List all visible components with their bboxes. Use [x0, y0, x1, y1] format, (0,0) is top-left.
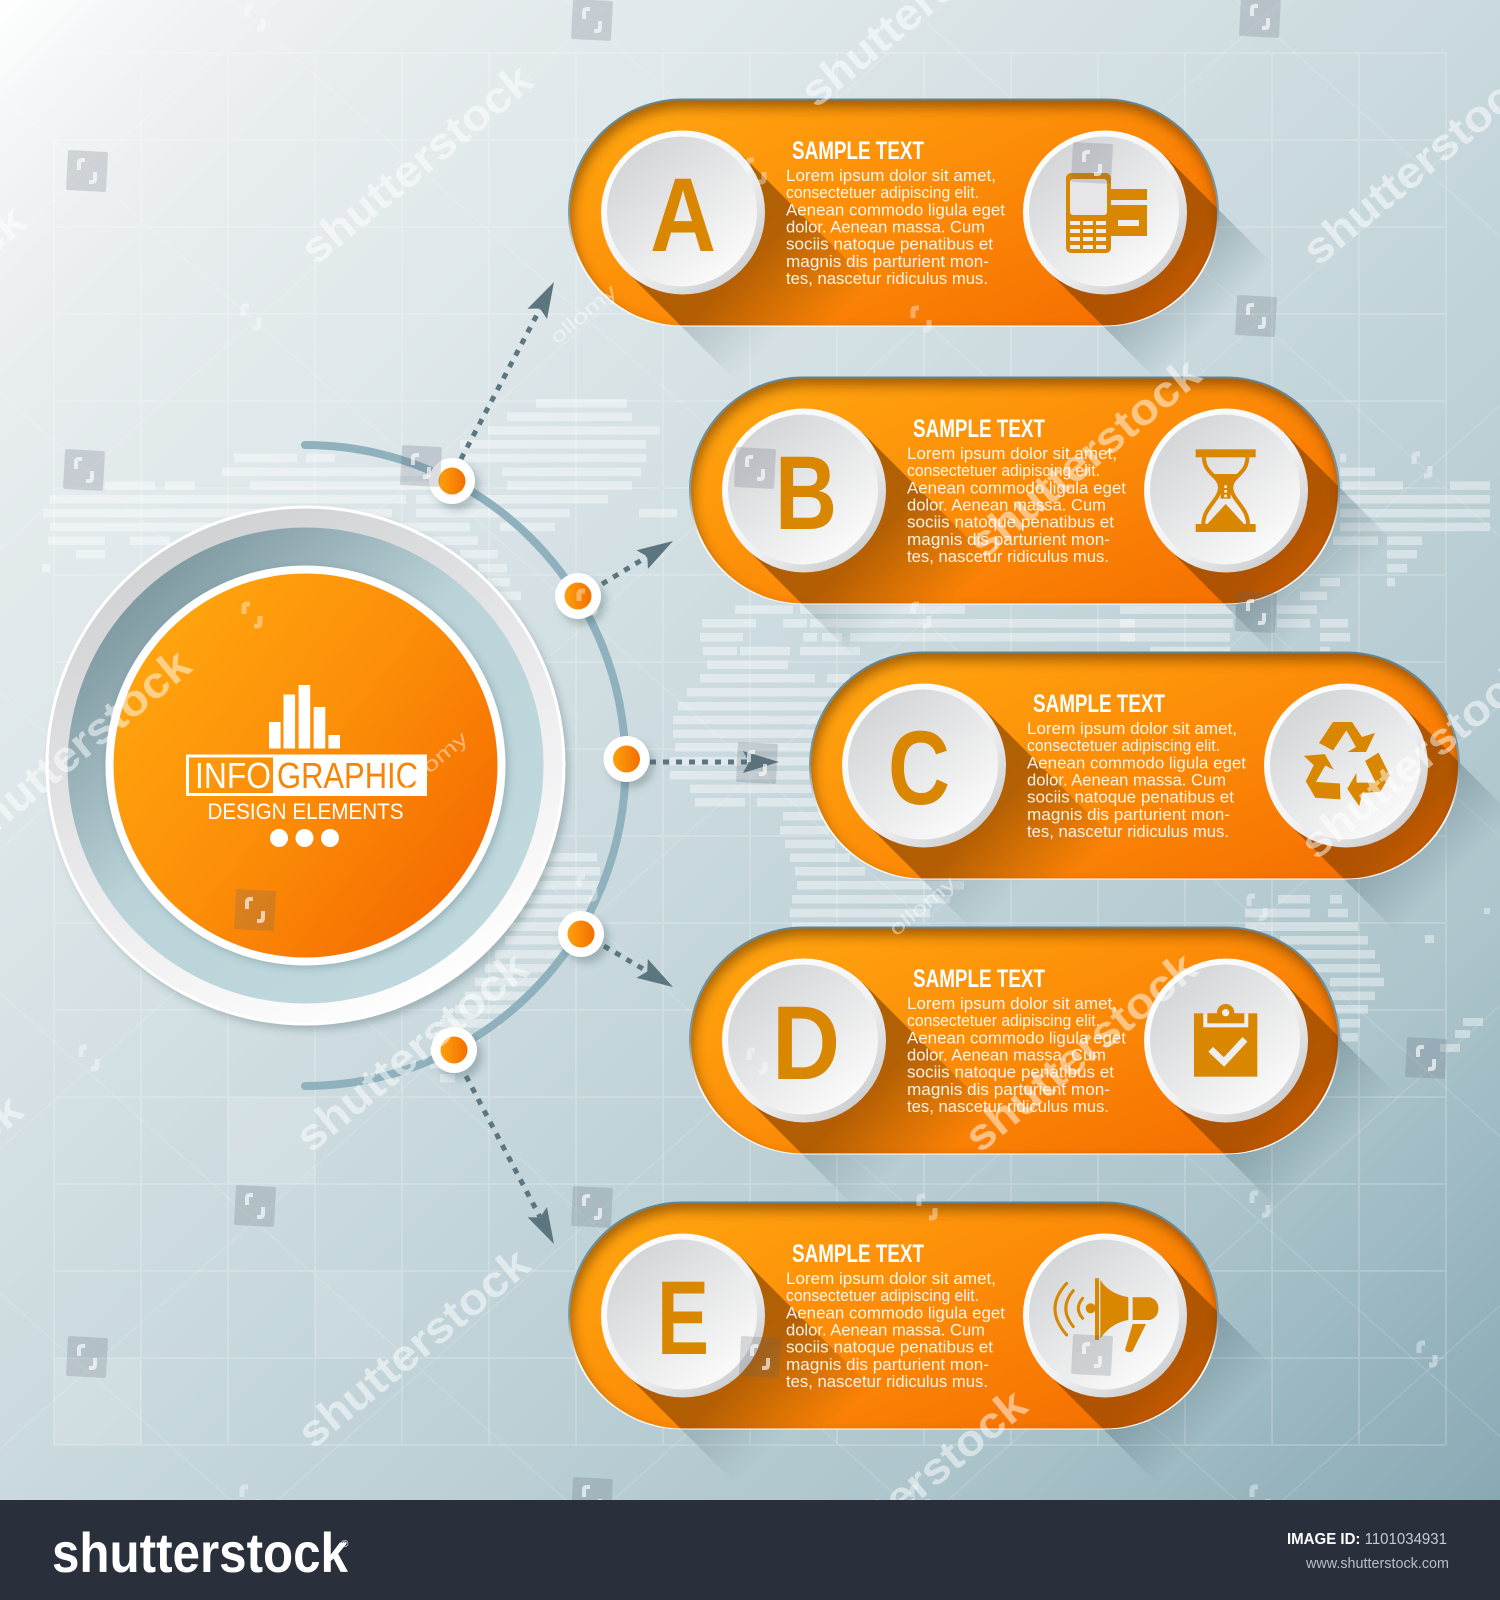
body text E: magnis dis parturient mon-: [786, 1355, 989, 1374]
south america stripes: [430, 853, 600, 1082]
watermark text: shutterstock: [288, 1238, 540, 1458]
node 2: [555, 573, 606, 625]
contributor marks: ollomy: [397, 728, 472, 796]
inner groove: [68, 528, 544, 1004]
body text C: magnis dis parturient mon-: [1027, 805, 1230, 824]
body text D: Lorem ipsum dolor sit amet,: [907, 994, 1117, 1013]
body text D: Aenean commodo ligula eget: [907, 1028, 1126, 1047]
arrow to panel A: [461, 277, 564, 459]
body text D: sociis natoque penatibus et: [907, 1063, 1114, 1082]
panel: B: [673, 366, 1500, 775]
body text B: magnis dis parturient mon-: [907, 530, 1110, 549]
body text D: [907, 994, 1126, 1116]
outer white ring: [46, 506, 566, 1026]
registered mark: ®: [341, 1539, 349, 1550]
body text A: consectetuer adipiscing elit.: [786, 183, 979, 202]
body text E: sociis natoque penatibus et: [786, 1338, 993, 1357]
heading D: SAMPLE TEXT: [913, 965, 1045, 993]
body text E: [786, 1269, 1005, 1391]
body text A: tes, nascetur ridiculus mus.: [786, 269, 988, 288]
three dots: [270, 829, 339, 847]
icon: clipboard: [1194, 1004, 1257, 1077]
body text E: tes, nascetur ridiculus mus.: [786, 1372, 988, 1391]
north america and greenland stripes: [42, 399, 677, 600]
letter C: C: [888, 710, 950, 827]
timeline nodes: [429, 458, 654, 1079]
footer logo: shutterstock: [52, 1521, 349, 1584]
watermark text: shutterstock: [286, 942, 538, 1162]
icon: megaphone: [1055, 1278, 1158, 1352]
body text C: dolor. Aenean massa. Cum: [1027, 770, 1226, 790]
heading E: SAMPLE TEXT: [792, 1240, 924, 1268]
icon: recycle: [1294, 722, 1397, 812]
website: www.shutterstock.com: [1305, 1555, 1449, 1572]
icon: bar chart: [269, 685, 340, 748]
body text A: [786, 166, 1005, 288]
body text A: magnis dis parturient mon-: [786, 252, 989, 271]
infographic label: [188, 755, 427, 796]
node 1: [429, 458, 480, 510]
node 3: [604, 736, 654, 788]
body text C: Aenean commodo ligula eget: [1027, 753, 1246, 772]
footer bar: [0, 1500, 1500, 1600]
body text D: tes, nascetur ridiculus mus.: [907, 1097, 1109, 1116]
arrow to panel E: [466, 1076, 564, 1249]
infographic label: INFO: [195, 755, 271, 796]
ring shadow: [51, 512, 569, 1030]
panel: D: [673, 916, 1500, 1325]
body text D: consectetuer adipiscing elit.: [907, 1011, 1100, 1030]
australia and new zealand stripes: [1245, 895, 1490, 1052]
watermark text: shutterstock: [785, 1379, 1037, 1599]
body text C: consectetuer adipiscing elit.: [1027, 736, 1220, 755]
central circle: [46, 506, 569, 1030]
body text E: dolor. Aenean massa. Cum: [786, 1320, 985, 1340]
asia stripes: [1120, 454, 1490, 655]
body text B: consectetuer adipiscing elit.: [907, 461, 1100, 480]
body text E: Aenean commodo ligula eget: [786, 1303, 1005, 1322]
infographic label: GRAPHIC: [277, 755, 418, 796]
arrow to panel D: [604, 946, 679, 996]
body text B: Lorem ipsum dolor sit amet,: [907, 444, 1117, 463]
panel: A: [552, 88, 1390, 497]
body text C: [1027, 719, 1246, 841]
arrow to panel B: [602, 532, 679, 584]
body text E: Lorem ipsum dolor sit amet,: [786, 1269, 996, 1288]
body text B: [907, 444, 1126, 566]
body text A: dolor. Aenean massa. Cum: [786, 218, 985, 236]
africa and europe stripes: [670, 605, 1135, 931]
node 5: [431, 1027, 482, 1079]
body text C: tes, nascetur ridiculus mus.: [1027, 822, 1229, 841]
letter D: D: [772, 985, 840, 1102]
striped world map: [42, 399, 1490, 1082]
heading A: SAMPLE TEXT: [792, 137, 924, 165]
contributor marks: ollomy: [546, 281, 621, 349]
icon: hourglass: [1196, 449, 1256, 532]
node 4: [558, 911, 609, 963]
body text B: sociis natoque penatibus et: [907, 513, 1114, 532]
image id: IMAGE ID: 1101034931: [1287, 1531, 1447, 1548]
body text D: magnis dis parturient mon-: [907, 1080, 1110, 1099]
letter B: B: [775, 435, 837, 552]
panel: E: [552, 1190, 1390, 1600]
body text B: Aenean commodo ligula eget: [907, 478, 1126, 497]
letter A: A: [650, 157, 716, 274]
watermark text: shutterstock: [291, 54, 543, 274]
heading C: SAMPLE TEXT: [1033, 690, 1165, 718]
panel: C: [793, 640, 1500, 1050]
contributor marks: ollomy: [885, 873, 960, 941]
body text C: sociis natoque penatibus et: [1027, 788, 1234, 807]
body text A: Aenean commodo ligula eget: [786, 200, 1005, 219]
subtitle: DESIGN ELEMENTS: [208, 799, 404, 824]
watermark text: shutterstock: [959, 348, 1211, 568]
body text B: dolor. Aenean massa. Cum: [907, 496, 1106, 514]
body text E: consectetuer adipiscing elit.: [786, 1286, 979, 1305]
arrow to panel C: [650, 751, 779, 773]
body text C: Lorem ipsum dolor sit amet,: [1027, 719, 1237, 738]
heading B: SAMPLE TEXT: [913, 415, 1045, 443]
contributor marks: [397, 281, 960, 941]
body text B: tes, nascetur ridiculus mus.: [907, 547, 1109, 566]
timeline arc: [305, 445, 626, 1086]
body text A: Lorem ipsum dolor sit amet,: [786, 166, 996, 185]
orange disc: [108, 568, 508, 968]
body text D: dolor. Aenean massa. Cum: [907, 1046, 1106, 1064]
letter E: E: [657, 1260, 709, 1377]
icon: phone and card: [1066, 173, 1147, 253]
body text A: sociis natoque penatibus et: [786, 235, 993, 254]
watermark text: shutterstock: [955, 942, 1207, 1162]
